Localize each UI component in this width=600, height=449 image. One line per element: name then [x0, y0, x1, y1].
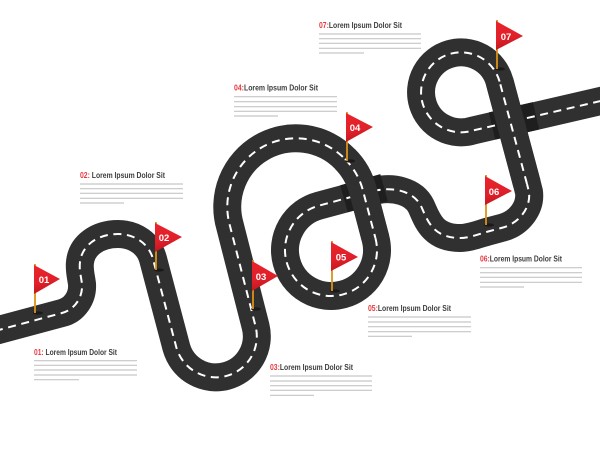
- text block 06: 06:Lorem Ipsum Dolor Sit: [480, 254, 562, 264]
- flag 01: 01: [39, 275, 50, 286]
- text block 04: [234, 83, 337, 116]
- flag 03: [251, 260, 278, 311]
- flag 04: 04: [350, 123, 361, 134]
- flag 06: 06: [489, 187, 499, 198]
- flag 05: 05: [336, 252, 347, 264]
- text block 03: [270, 362, 372, 395]
- flag 01: [33, 264, 60, 315]
- flag 07: 07: [501, 32, 511, 43]
- text block 06: [480, 254, 582, 287]
- flag 05: [330, 241, 358, 293]
- text block 02: [80, 170, 183, 203]
- flag 02: 02: [159, 233, 169, 244]
- flag 04: [345, 112, 373, 163]
- text block 02: 02: Lorem Ipsum Dolor Sit: [80, 170, 165, 180]
- flag 06: [484, 175, 512, 227]
- text block 03: 03:Lorem Ipsum Dolor Sit: [270, 362, 353, 372]
- flag 07: [495, 20, 523, 71]
- flag 02: [154, 222, 182, 272]
- winding road: [0, 52, 600, 377]
- text block 01: 01: Lorem Ipsum Dolor Sit: [34, 347, 117, 357]
- flag 03: 03: [256, 272, 266, 283]
- text block 05: 05:Lorem Ipsum Dolor Sit: [368, 303, 451, 313]
- text block 05: [368, 303, 471, 336]
- text block 04: 04:Lorem Ipsum Dolor Sit: [234, 83, 318, 93]
- text block 07: [319, 20, 421, 53]
- text block 07: 07:Lorem Ipsum Dolor Sit: [319, 20, 402, 30]
- text block 01: [34, 347, 137, 380]
